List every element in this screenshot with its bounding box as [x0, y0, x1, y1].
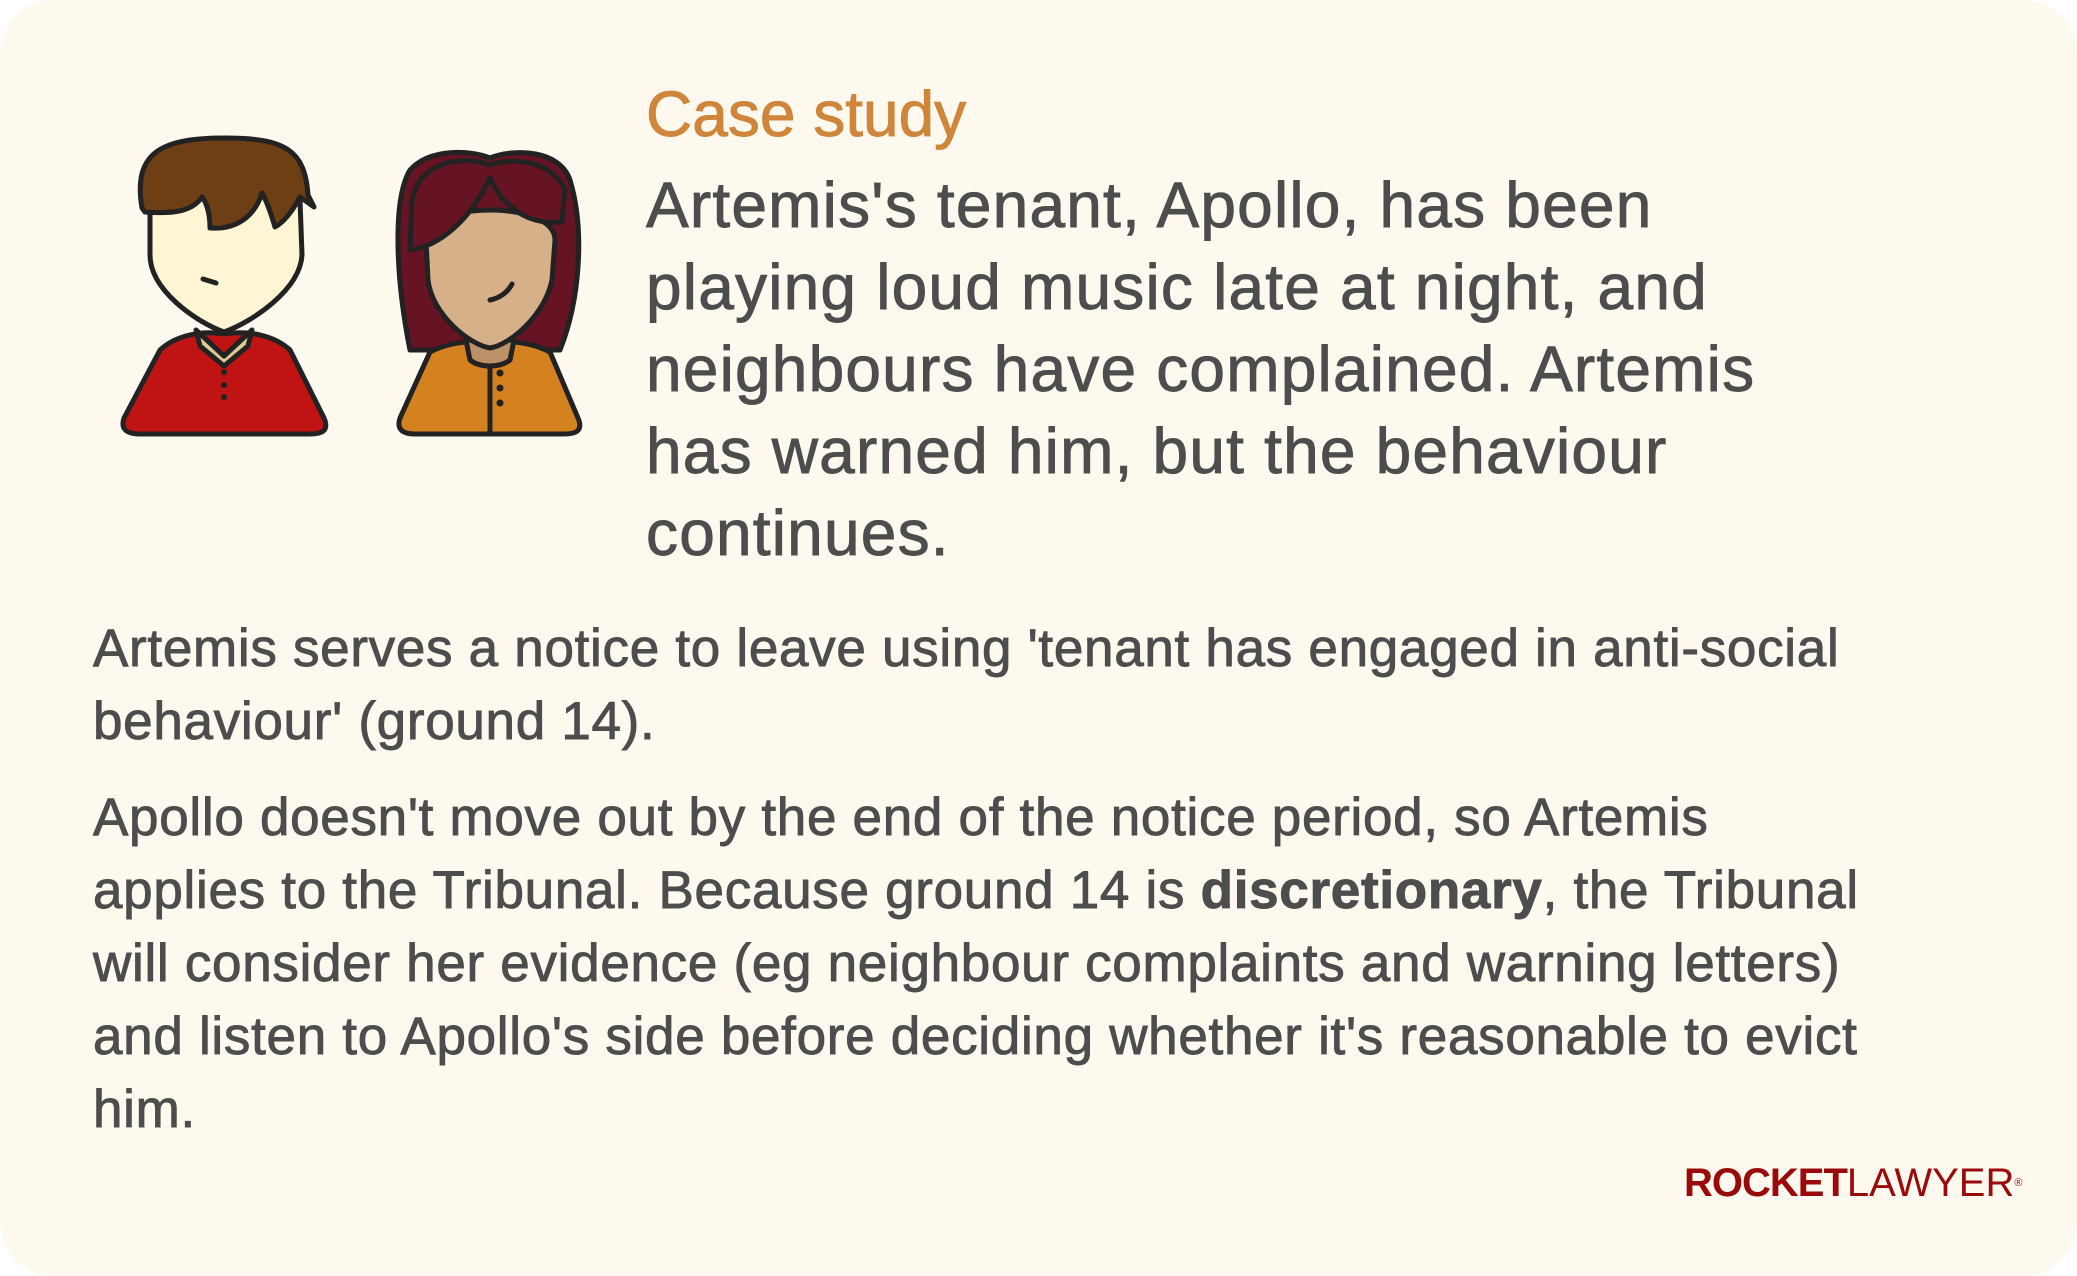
- icon: two people: [120, 136, 582, 436]
- text block: intro: neighbours have complained. Artemis: [646, 333, 1755, 405]
- text block: intro: playing loud music late at night, and: [646, 251, 1708, 323]
- text block: intro: Artemis's tenant, Apollo, has been: [646, 169, 1652, 241]
- text block: tribunal: Apollo doesn't move out by the end of the notice period, so Artemis: [93, 788, 1709, 847]
- text block: tribunal: will consider her evidence (eg neighbour complaints and warning letters): [93, 934, 1840, 993]
- text block: intro: [646, 169, 1755, 569]
- text block: tribunal: [92, 788, 1859, 1139]
- text block: tribunal: applies to the Tribunal. Because ground 14 is discretionary, the Tribunal: [93, 861, 1859, 920]
- heading: Case study: Case study: [646, 78, 966, 150]
- text block: intro: continues.: [646, 497, 950, 569]
- text block: tribunal: him.: [93, 1080, 196, 1139]
- text block: tribunal: and listen to Apollo's side before deciding whether it's reasonable to evict: [93, 1007, 1858, 1066]
- icon: man: [123, 138, 326, 434]
- text block: notice: [92, 619, 1839, 751]
- text block: intro: has warned him, but the behaviour: [646, 415, 1668, 487]
- text block: notice: Artemis serves a notice to leave using 'tenant has engaged in anti-social: [93, 619, 1839, 678]
- icon: woman: [398, 152, 580, 434]
- text block: notice: behaviour' (ground 14).: [93, 692, 655, 751]
- logo: Rocket Lawyer: ROCKETLAWYER®: [1684, 1161, 2022, 1205]
